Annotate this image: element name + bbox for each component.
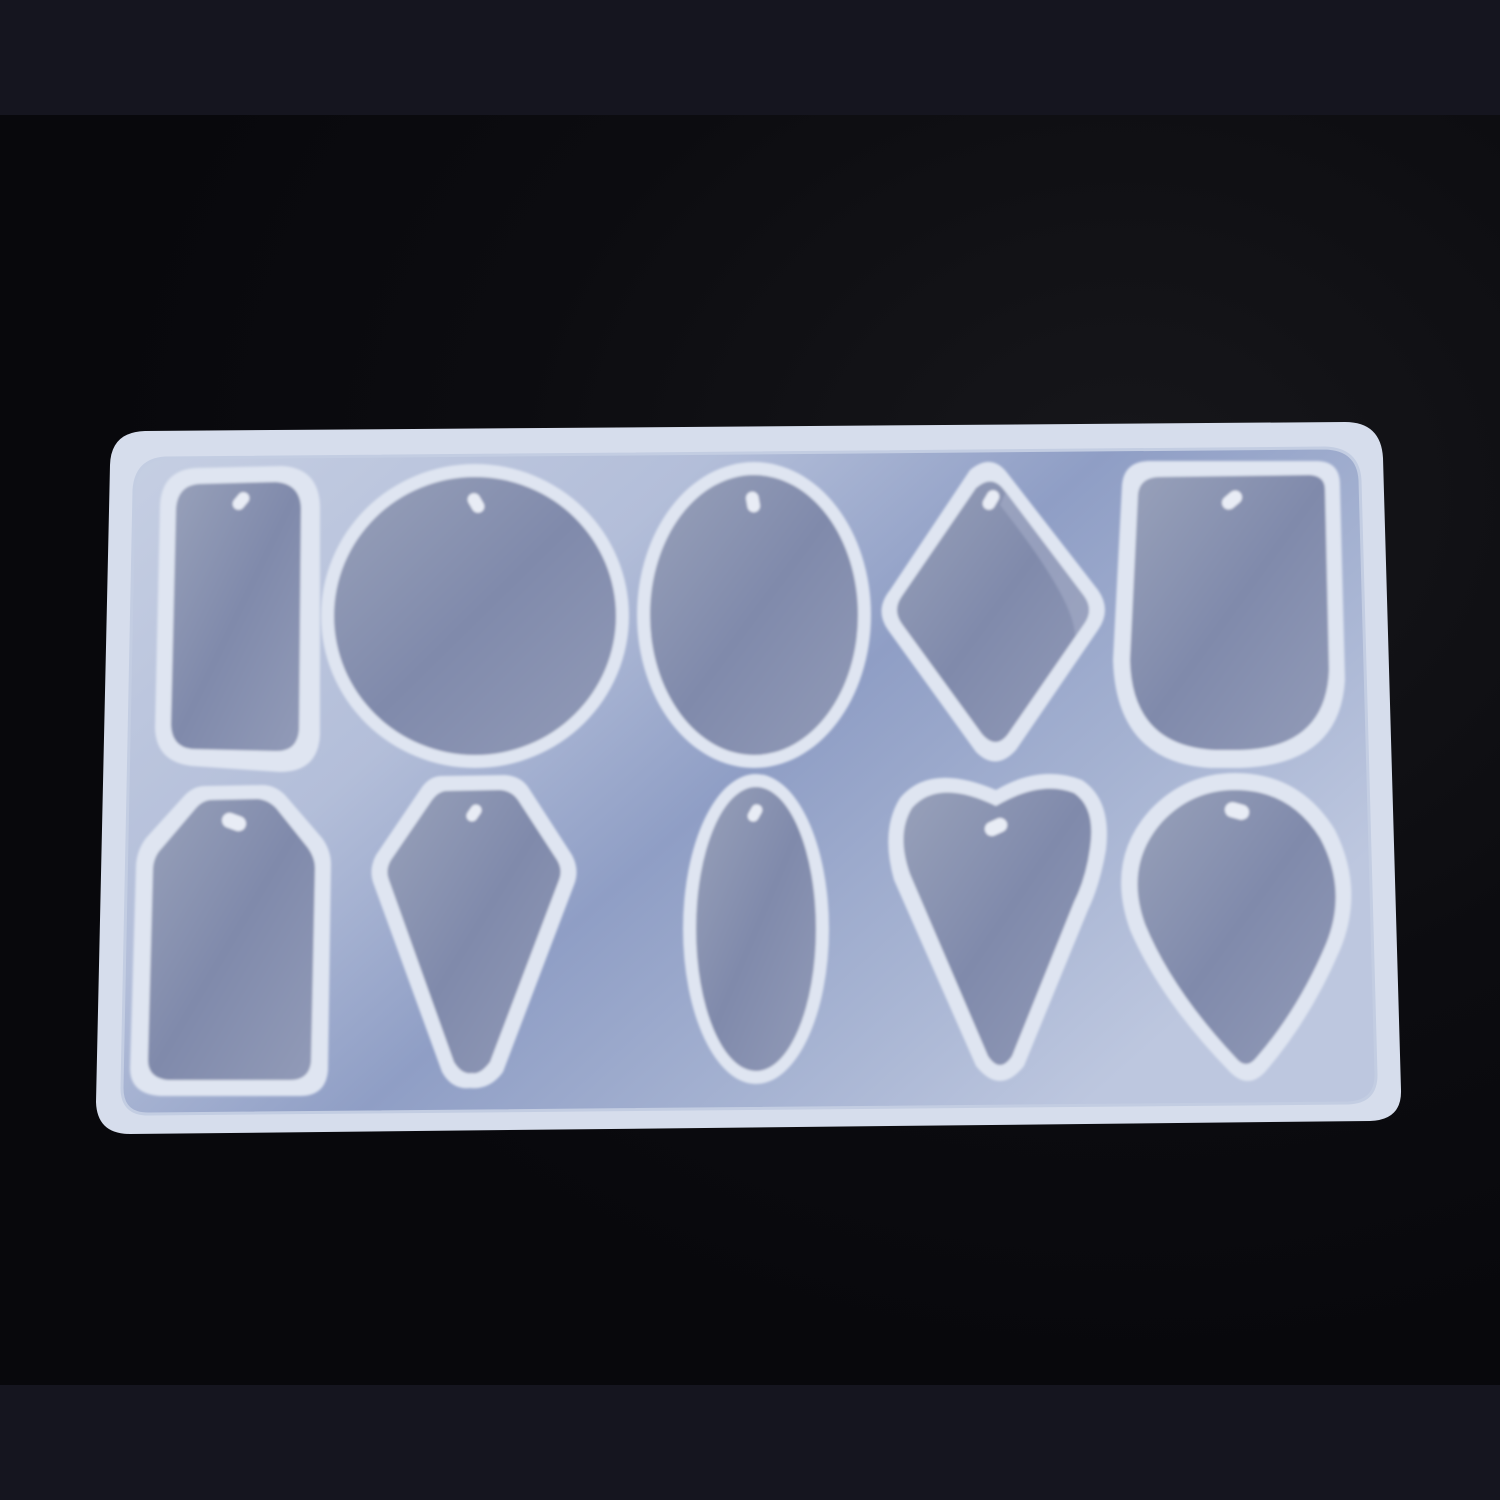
cavity: rounded rectangle [155, 466, 320, 772]
cavity: teardrop [1121, 773, 1351, 1081]
tray inner surface [122, 448, 1376, 1114]
cavity: heart [888, 774, 1107, 1081]
silicone mold tray [96, 422, 1401, 1134]
cavity: arch shield [1113, 461, 1345, 768]
cavity: narrow oval [683, 774, 829, 1084]
cavity: tag [130, 785, 331, 1096]
cavity: coffin kite [371, 775, 577, 1088]
cavity: oval [637, 462, 871, 768]
highlight facet [1000, 492, 1089, 636]
cavity: circle [321, 464, 629, 768]
tray outer rim [96, 422, 1401, 1134]
cavity: diamond [881, 462, 1105, 762]
